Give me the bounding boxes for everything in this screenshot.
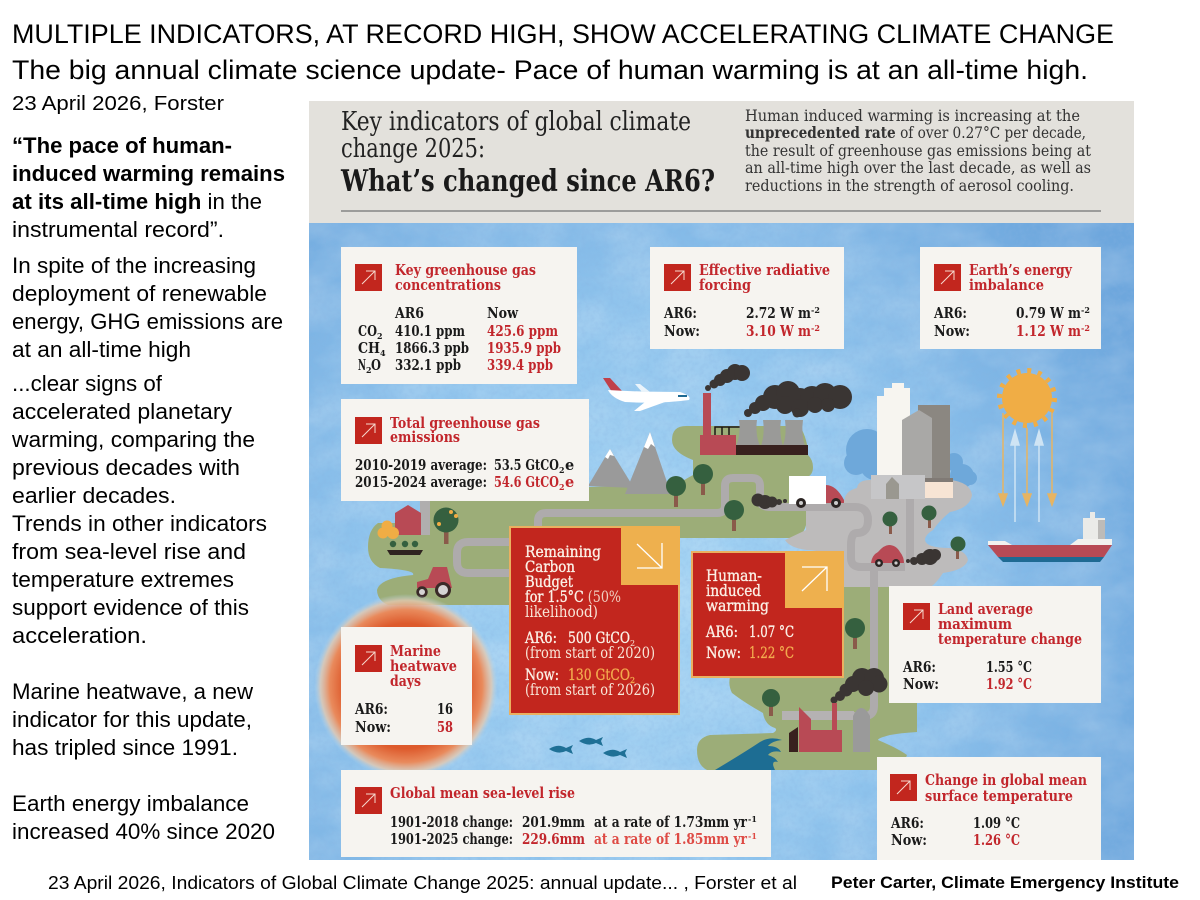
sun — [1000, 370, 1054, 426]
icon: up arrow — [664, 264, 691, 291]
header title: Key indicators of global climate — [341, 107, 691, 137]
marine heatwave paragraph — [12, 679, 253, 760]
heading: forcing — [699, 276, 751, 294]
heading — [390, 414, 540, 446]
marine heatwave glow — [314, 594, 498, 778]
header summary — [745, 107, 1092, 195]
left commentary text — [11, 133, 285, 844]
marine heatwave paragraph: Marine heatwave, a new — [12, 679, 253, 704]
data table: CO — [358, 323, 377, 340]
data — [390, 814, 757, 848]
panel: global mean sea-level rise — [341, 770, 771, 857]
data — [663, 305, 820, 340]
AR6 value: 2 — [630, 639, 635, 648]
icon: farm — [378, 500, 458, 598]
panel: total greenhouse gas emissions — [341, 399, 589, 501]
up arrows — [1011, 431, 1043, 522]
icon: fish — [549, 737, 627, 758]
data — [355, 457, 574, 492]
data table: 332.1 ppb — [395, 357, 461, 374]
land masses — [368, 426, 972, 770]
data — [890, 815, 1020, 849]
data: AR6: — [705, 623, 738, 641]
title: MULTIPLE INDICATORS, AT RECORD HIGH, SHOW ACCELERATING CLIMATE CHANGE — [12, 19, 1114, 49]
heading: Earth’s energy — [969, 261, 1073, 279]
ocean background — [309, 222, 1134, 860]
header summary: the result of greenhouse gas emissions being at — [745, 142, 1092, 160]
data: 1.92 °C — [986, 676, 1032, 693]
heading — [938, 600, 1082, 648]
heading — [395, 261, 536, 294]
icon: up arrow — [890, 774, 917, 801]
data table: 2 — [377, 331, 383, 341]
heading: Change in global mean — [925, 771, 1087, 789]
data: AR6: — [933, 305, 967, 322]
AR6 value: (from start of 2020) — [525, 644, 655, 662]
header title: What’s changed since AR6? — [340, 164, 715, 199]
now value — [525, 666, 655, 699]
heading: Remaining — [525, 543, 601, 561]
data: at a rate of 1.85mm yr — [594, 831, 747, 848]
dark shed — [789, 727, 798, 752]
icon: up arrow — [785, 551, 844, 608]
heading — [390, 642, 457, 690]
chimney and red building — [700, 393, 736, 455]
icon: sun with radiation arrows — [999, 370, 1056, 522]
quote — [12, 133, 285, 242]
data: 201.9mm — [522, 814, 586, 831]
panel: remaining carbon budget — [510, 526, 680, 714]
data table: 2 — [366, 365, 372, 375]
data: Now: — [903, 676, 939, 693]
heading: Effective radiative — [699, 261, 830, 279]
renewable paragraph — [12, 253, 283, 362]
heading: likelihood) — [525, 603, 598, 621]
city backdrop cloud — [844, 429, 977, 488]
panel: human-induced warming — [692, 551, 844, 677]
data table — [358, 305, 561, 375]
data: -2 — [1081, 305, 1090, 315]
data: 58 — [437, 719, 453, 736]
green land north and west — [368, 426, 813, 605]
data table: 339.4 ppb — [487, 357, 553, 374]
icon: mountains — [588, 432, 671, 494]
data — [902, 659, 1032, 693]
data: AR6: — [663, 305, 697, 322]
heading: induced — [706, 582, 761, 600]
data: 229.6mm — [522, 831, 586, 848]
heading: Marine — [390, 642, 441, 660]
AR6 value: 500 GtCO — [568, 629, 630, 647]
data: 1.09 °C — [973, 815, 1020, 832]
data table: CH — [358, 340, 380, 357]
data: 2015-2024 average: — [355, 474, 487, 491]
panel: change in global mean surface temperature — [877, 757, 1101, 860]
quote: instrumental record”. — [12, 217, 224, 242]
data: -2 — [811, 323, 820, 333]
icon: up arrow — [355, 645, 382, 672]
data: 1.26 °C — [973, 832, 1020, 849]
now value: Now: — [525, 666, 559, 684]
data table: N — [358, 357, 366, 374]
heading: Global mean sea-level rise — [390, 784, 575, 802]
grey urban land — [785, 480, 972, 587]
data table: 1935.9 ppb — [487, 340, 561, 357]
icon: up arrow — [934, 264, 961, 291]
heading: heatwave — [390, 657, 457, 675]
data table: Now — [487, 305, 518, 322]
trees — [666, 464, 966, 716]
data: -1 — [748, 814, 757, 824]
pipes — [715, 427, 740, 435]
data: Now: — [934, 323, 970, 340]
acceleration paragraph: previous decades with — [12, 455, 240, 480]
data: 0.79 W m — [1016, 305, 1082, 322]
icon: up arrow — [355, 417, 382, 444]
acceleration paragraph: temperature extremes — [12, 567, 234, 592]
footer citation: 23 April 2026, Indicators of Global Climate Change 2025: annual update... , Forster et al — [48, 873, 797, 893]
data: e — [565, 474, 574, 491]
data — [933, 305, 1090, 340]
icon: truck with exhaust — [752, 476, 844, 509]
cooling towers — [736, 420, 805, 446]
header summary: reductions in the strength of aerosol cooling. — [745, 177, 1074, 195]
heading: Land average — [938, 600, 1033, 618]
data table: 410.1 ppm — [395, 323, 466, 340]
panel: marine heatwave days — [341, 627, 472, 745]
data table: O — [371, 357, 381, 374]
data: 1.55 °C — [986, 659, 1032, 676]
renewable paragraph: at an all-time high — [12, 337, 191, 362]
data — [354, 701, 453, 736]
cross road — [782, 711, 854, 720]
tractor — [416, 567, 452, 598]
data: e — [565, 457, 574, 474]
heading: Key greenhouse gas — [395, 261, 536, 279]
heading: days — [390, 672, 421, 690]
heading: concentrations — [395, 276, 501, 294]
icon: down arrow — [621, 526, 680, 585]
heading: Budget — [525, 573, 574, 591]
heading: emissions — [390, 428, 460, 446]
renewable paragraph: energy, GHG emissions are — [12, 309, 283, 334]
heading — [969, 261, 1073, 294]
acceleration paragraph: ...clear signs of — [12, 371, 163, 396]
silo — [853, 708, 870, 752]
barn — [395, 505, 421, 535]
icon: up arrow — [355, 264, 382, 291]
header summary: unprecedented rate of over 0.27°C per decade, — [745, 123, 1086, 142]
subtitle: The big annual climate science update- Pace of human warming is at an all-time high. — [12, 55, 1088, 85]
panel: key greenhouse gas concentrations — [341, 247, 577, 384]
heading: Human- — [706, 567, 762, 585]
acceleration paragraph: Trends in other indicators — [12, 511, 267, 536]
data: 2010-2019 average: — [355, 457, 487, 474]
heading — [699, 261, 830, 294]
data: 1.22 °C — [749, 644, 794, 662]
panel: effective radiative forcing — [650, 247, 844, 349]
data: 1901-2018 change: — [390, 814, 513, 831]
data: 1.07 °C — [749, 623, 794, 641]
icon: ship — [988, 512, 1112, 562]
data table: 4 — [380, 348, 386, 358]
icon: city towers — [871, 383, 953, 499]
data: 3.10 W m — [746, 323, 812, 340]
data: 2.72 W m — [746, 305, 812, 322]
acceleration paragraph: support evidence of this — [12, 595, 249, 620]
AR6 value: AR6: — [524, 629, 557, 647]
data: -2 — [1081, 323, 1090, 333]
acceleration paragraph: warming, comparing the — [11, 427, 255, 452]
heading: surface temperature — [925, 787, 1073, 805]
quote: induced warming remains — [12, 161, 285, 186]
footer credit: Peter Carter, Climate Emergency Institute — [831, 874, 1179, 892]
infographic panel — [309, 101, 1134, 860]
data: Now: — [664, 323, 700, 340]
heading: maximum — [938, 615, 1012, 633]
acceleration paragraph: from sea-level rise and — [12, 539, 246, 564]
now value: 2 — [630, 676, 635, 685]
acceleration paragraph: accelerated planetary — [12, 399, 232, 424]
icon: up arrow — [355, 787, 382, 814]
data: 2 — [559, 465, 565, 475]
orange tree — [434, 508, 458, 544]
AR6 value — [524, 629, 655, 662]
panel: land average maximum temperature change — [889, 586, 1101, 703]
data: at a rate of 1.73mm yr — [594, 814, 747, 831]
date and author: 23 April 2026, Forster — [12, 92, 224, 115]
icon: up arrow — [903, 603, 930, 630]
data: AR6: — [890, 815, 924, 832]
energy imbalance paragraph: increased 40% since 2020 — [12, 819, 275, 844]
factory — [799, 703, 842, 752]
heading: Total greenhouse gas — [390, 414, 540, 432]
heading: warming — [706, 597, 769, 615]
green land south — [697, 587, 917, 770]
data: AR6: — [902, 659, 936, 676]
quote: at its all-time high in the — [12, 189, 262, 214]
header band — [309, 101, 1134, 223]
renewable paragraph: In spite of the increasing — [12, 253, 256, 278]
heading: for 1.5°C (50% — [525, 588, 621, 606]
icon: lower factory with smoke — [782, 668, 888, 752]
now value: 130 GtCO — [568, 666, 630, 684]
header title: change 2025: — [341, 134, 485, 164]
hay bales — [378, 520, 399, 539]
planter — [387, 541, 423, 555]
dark base — [736, 445, 808, 455]
data: 16 — [437, 701, 453, 718]
marine heatwave paragraph: indicator for this update, — [12, 707, 252, 732]
acceleration paragraph — [11, 371, 267, 648]
data table: 1866.3 ppb — [395, 340, 469, 357]
smoke — [705, 364, 852, 418]
heading — [525, 543, 621, 621]
acceleration paragraph: acceleration. — [12, 623, 147, 648]
data: 53.5 GtCO — [494, 457, 559, 474]
data: Now: — [891, 832, 927, 849]
icon: wave — [715, 738, 782, 770]
heading — [706, 567, 769, 615]
icon: airplane — [603, 378, 690, 411]
data — [705, 623, 794, 662]
data: -1 — [748, 831, 757, 841]
down arrows — [999, 413, 1056, 505]
icon: car with exhaust — [871, 545, 941, 567]
header summary: Human induced warming is increasing at the — [745, 107, 1080, 125]
silo — [420, 500, 430, 535]
data: 1.12 W m — [1016, 323, 1082, 340]
data table: AR6 — [394, 305, 424, 322]
marine heatwave paragraph: has tripled since 1991. — [12, 735, 238, 760]
data: 1901-2025 change: — [390, 831, 513, 848]
data: Now: — [355, 719, 391, 736]
heading: Carbon — [525, 558, 575, 576]
data: AR6: — [354, 701, 388, 718]
smoke — [830, 668, 888, 704]
data: -2 — [811, 305, 820, 315]
energy imbalance paragraph — [12, 791, 275, 844]
heading — [925, 771, 1087, 805]
roads — [457, 478, 910, 716]
acceleration paragraph: earlier decades. — [12, 483, 176, 508]
header title — [340, 107, 715, 199]
quote: “The pace of human- — [12, 133, 232, 158]
data: 54.6 GtCO — [494, 474, 559, 491]
panel: earth's energy imbalance — [920, 247, 1101, 349]
now value: (from start of 2026) — [525, 681, 655, 699]
data: Now: — [706, 644, 741, 662]
data: 2 — [559, 482, 565, 492]
data table: 425.6 ppm — [487, 323, 559, 340]
heading: temperature change — [938, 630, 1082, 648]
icon: factory with cooling towers — [700, 364, 852, 455]
energy imbalance paragraph: Earth energy imbalance — [12, 791, 249, 816]
renewable paragraph: deployment of renewable — [12, 281, 267, 306]
heading: imbalance — [969, 276, 1044, 294]
header summary: an all-time high over the last decade, as well as — [745, 159, 1091, 177]
